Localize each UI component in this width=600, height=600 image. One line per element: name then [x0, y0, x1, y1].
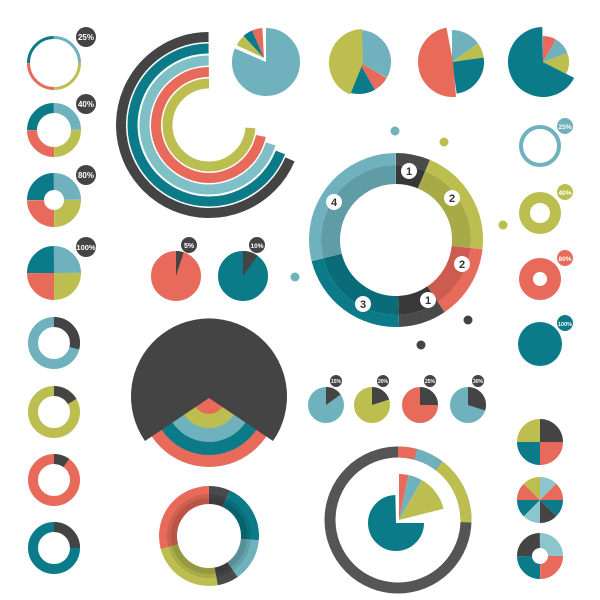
donut: olive — [33, 391, 75, 433]
donut: teal — [33, 527, 75, 569]
badge: 20% — [377, 375, 389, 387]
donut: 80% — [36, 182, 72, 218]
badge: 100%: 100% — [76, 243, 96, 252]
badge: 80% coral — [557, 250, 573, 266]
number labels: 1 — [425, 295, 431, 307]
badge: 10%: 10% — [250, 243, 264, 250]
donut: quarters — [524, 540, 556, 572]
badge: 5%: 5% — [184, 243, 195, 250]
donut: light blue — [33, 322, 75, 364]
pie: 10% — [230, 264, 256, 288]
badge: 100% teal: 100% — [558, 322, 572, 328]
circle: 100% — [518, 322, 562, 366]
badge: 10% — [249, 237, 265, 253]
badge: 25% small — [424, 375, 436, 387]
badge: 20%: 20% — [378, 379, 389, 385]
badge: 25% light — [557, 118, 573, 134]
pie: 15% — [317, 396, 335, 414]
number labels: 2 — [449, 193, 455, 205]
badge: 5% — [181, 237, 197, 253]
number labels: 3 — [360, 299, 366, 311]
badge: 30%: 30% — [473, 379, 484, 385]
donut: 40% — [32, 108, 76, 152]
badge: 80%: 80% — [78, 171, 94, 180]
badge: 15% — [330, 375, 342, 387]
ring: 40% — [524, 198, 556, 228]
chart: ring with exploded pie — [303, 425, 493, 600]
pie: 25% — [411, 396, 429, 414]
pie: 30% — [459, 396, 477, 414]
pie A: light blue — [243, 37, 285, 79]
badge: 25% — [76, 27, 96, 47]
pie: 20% — [363, 396, 381, 414]
badge: 25%: 25% — [78, 33, 94, 42]
pie D: teal — [519, 38, 567, 86]
chart: multi-tone donut — [152, 479, 266, 593]
pie B: olive — [337, 40, 385, 85]
ring: 25% — [521, 127, 559, 165]
donut: coral — [33, 459, 75, 501]
badge: 25% small: 25% — [425, 379, 436, 385]
number labels: 2 — [459, 259, 465, 271]
chart: numbered donut — [284, 128, 508, 352]
ring: 80% — [526, 265, 554, 293]
donut: 25% — [28, 38, 80, 88]
pie: 5% — [164, 264, 188, 288]
pie: 100% — [40, 260, 68, 286]
badge: 30% — [472, 375, 484, 387]
badge: 40% — [76, 94, 96, 114]
badge: 100% — [76, 237, 96, 257]
badge: 80% coral: 80% — [558, 256, 572, 263]
badge: 40%: 40% — [78, 100, 94, 109]
pie: eighths — [524, 484, 556, 516]
badge: 100% teal — [557, 315, 573, 331]
badge: 15%: 15% — [331, 379, 342, 385]
badge: 25% light: 25% — [558, 124, 572, 131]
pie: quarters — [528, 430, 552, 454]
badge: 80% — [76, 165, 96, 185]
number labels — [326, 163, 470, 312]
badge: 40% olive: 40% — [558, 190, 572, 197]
decorative dots — [290, 126, 508, 350]
chart: dark pie with rainbow notch — [131, 318, 287, 467]
number labels: 4 — [331, 197, 338, 209]
pie C: coral — [430, 40, 474, 84]
badge: 40% olive — [557, 184, 573, 200]
chart: concentric C arcs — [94, 10, 324, 240]
number labels: 1 — [406, 166, 412, 178]
